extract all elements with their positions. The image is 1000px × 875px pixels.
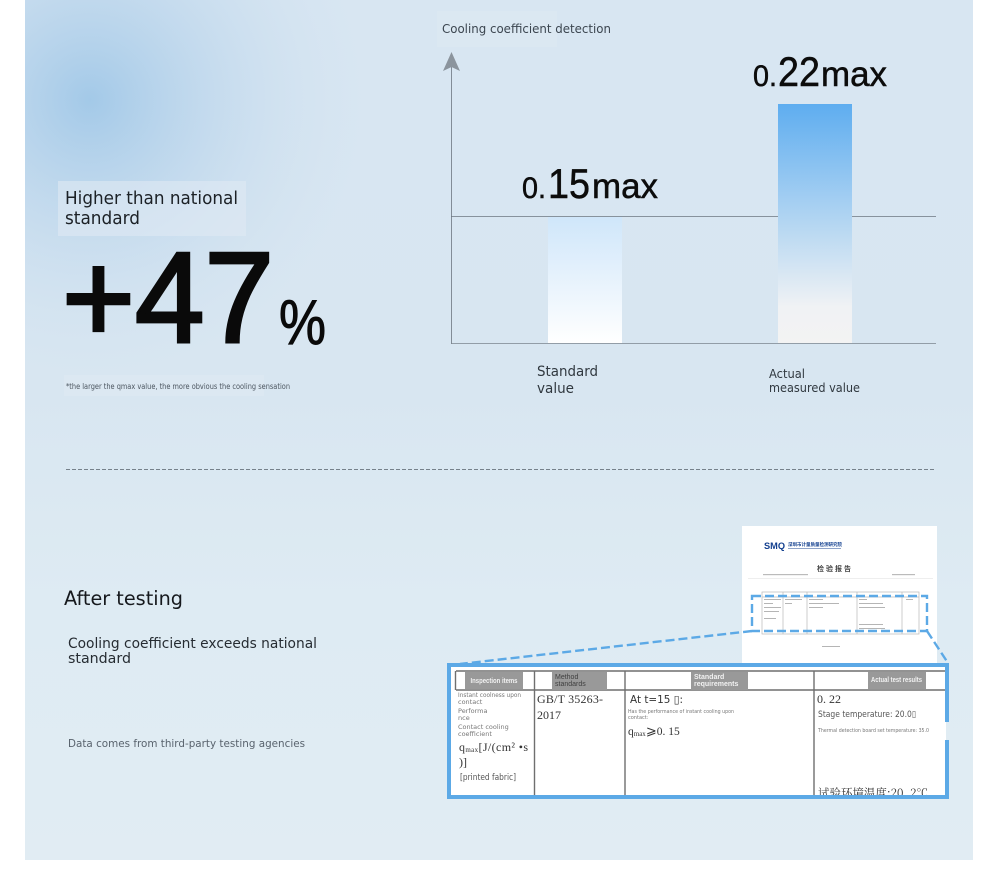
header: actual test results [868, 672, 926, 689]
bar: standard value [548, 217, 622, 343]
axis label: actual measured value [769, 366, 860, 395]
big number: +47%: +47 [62, 226, 274, 370]
value label: 0.22max [753, 48, 887, 95]
column: inspection items: Performa [458, 707, 488, 715]
column: actual test results: Thermal detection board set temperature: 35.0 [817, 728, 929, 734]
big number: +47%: % [279, 288, 326, 358]
report thumbnail [742, 526, 937, 663]
enlarged test results table [449, 665, 947, 801]
header: standard requirements [691, 672, 748, 690]
value label: 0.22max: max [821, 55, 887, 94]
footnote: qmax explanation: *the larger the qmax value, the more obvious the cooling sensation [66, 382, 290, 391]
highlight frame [449, 665, 947, 797]
text: data source: Data comes from third-party testing agencies [68, 737, 305, 750]
column: inspection items: )] [459, 755, 467, 769]
text: exceeds national standard: standard [68, 651, 131, 667]
heading: after testing: After testing [64, 587, 183, 610]
logo: SMQ: 深圳市计量质量检测研究院 [788, 541, 842, 548]
axis label: standard value [537, 364, 598, 397]
callout: dashed highlight and zoom lines [460, 596, 948, 664]
footnote: qmax explanation [64, 375, 290, 396]
bar chart: cooling coefficient [443, 48, 936, 397]
logo: SMQ: SMQ [764, 541, 785, 552]
column: inspection items: q [459, 740, 465, 754]
column: standard requirements [628, 693, 734, 738]
report title: 检验报告 [817, 564, 853, 574]
header: standard requirements: requirements [694, 681, 738, 688]
heading: higher than national standard [58, 181, 246, 236]
y axis with arrow [443, 52, 460, 344]
column: method standards: 2017 [537, 708, 561, 722]
chart title [437, 11, 611, 47]
axis label: standard value: value [537, 381, 574, 397]
value label: 0.15max: max [592, 167, 658, 206]
value label: 0.15max: 15 [548, 160, 590, 207]
national standard reference line [451, 216, 936, 218]
text: exceeds national standard [68, 636, 317, 667]
column: inspection items: [printed fabric] [460, 773, 516, 783]
bar: actual measured value [778, 104, 852, 343]
logo: SMQ [764, 541, 842, 552]
column: standard requirements: Has the performance of instant cooling upon [628, 709, 734, 715]
miniature table text [764, 599, 913, 647]
heading: higher than national standard: standard [65, 209, 140, 229]
header: inspection items: Inspection items [470, 678, 518, 685]
column: standard requirements: max [634, 730, 646, 738]
value label: 0.22max: 22 [778, 48, 820, 95]
axis label: standard value: Standard [537, 364, 598, 380]
column: inspection items [458, 691, 528, 783]
header: inspection items [465, 672, 523, 689]
value label: 0.15max: 0. [522, 172, 546, 205]
column: actual test results: 0. 22 [817, 692, 841, 706]
chart title: Cooling coefficient detection [442, 21, 611, 36]
column: inspection items: coefficient [458, 730, 492, 738]
column: actual test results: Stage temperature: 20.0▯ [818, 710, 916, 720]
column: method standards: GB/T 35263- [537, 692, 603, 706]
value label: 0.22max: 0. [753, 60, 777, 93]
x axis [451, 342, 936, 344]
column: actual test results [817, 692, 929, 801]
header: method standards: Method [555, 674, 578, 681]
column: standard requirements: At t=15 ▯: [630, 693, 683, 706]
column: inspection items: max [465, 746, 479, 754]
column: standard requirements: q [628, 726, 634, 738]
text: exceeds national standard: Cooling coefficient exceeds national [68, 636, 317, 652]
header: actual test results: Actual test results [871, 677, 922, 684]
axis label: actual measured value: Actual [769, 366, 805, 381]
column: inspection items: [J/(cm² •s [479, 740, 528, 754]
column: method standards [537, 692, 603, 722]
column: inspection items: nce [458, 714, 470, 722]
column: standard requirements: 0. 15 [657, 726, 680, 738]
header: method standards: standards [555, 681, 586, 688]
miniature table [762, 592, 919, 634]
heading: higher than national standard: Higher than national [65, 189, 238, 209]
column: standard requirements: ⩾ [646, 723, 657, 738]
column: inspection items: Contact cooling [458, 723, 509, 731]
axis label: actual measured value: measured value [769, 380, 860, 395]
table grid [456, 671, 946, 796]
column: actual test results: 试验环境温度:20. 2℃ [818, 785, 928, 801]
header: method standards [552, 672, 607, 690]
value label: 0.15max [522, 160, 658, 207]
column: inspection items: Instant coolness upon [458, 691, 521, 699]
column: inspection items: contact [458, 698, 483, 706]
header: standard requirements: Standard [694, 674, 724, 681]
report meta line [748, 574, 933, 579]
column: standard requirements: contact: [628, 715, 649, 721]
